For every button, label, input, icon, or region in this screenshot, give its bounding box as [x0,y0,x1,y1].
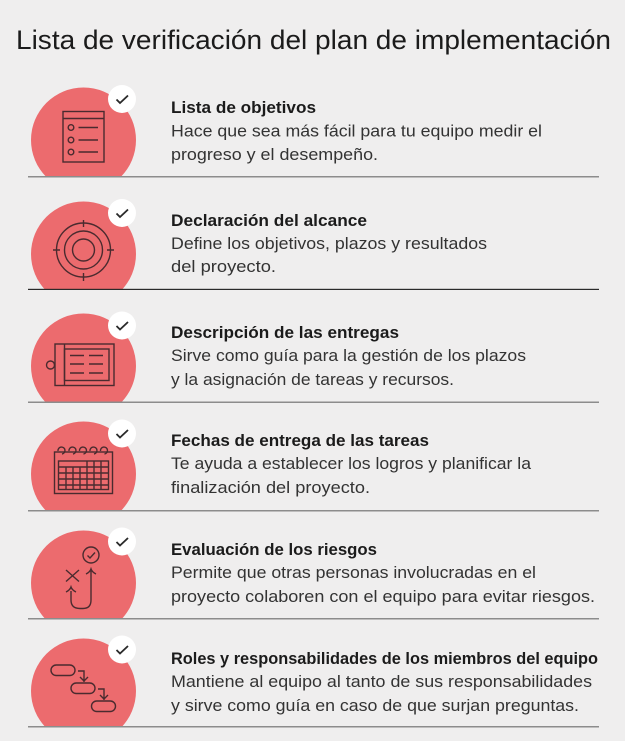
icon: check badge [108,85,136,113]
description [171,347,526,389]
icon: risk path [66,547,99,608]
description: Te ayuda a establecer los logros y planificar la [171,455,532,473]
panel: evaluación de los riesgos [28,528,599,620]
description: Hace que sea más fácil para tu equipo medir el [171,122,542,140]
title: Lista de verificación del plan de implementación [16,25,611,55]
panel: fechas de entrega [28,420,599,512]
icon: check badge [108,420,136,448]
panel: roles y responsabilidades [28,636,599,728]
panel: lista de objetivos [28,85,599,178]
description [171,564,595,606]
icon: check badge [108,636,136,664]
heading: Descripción de las entregas [171,324,399,342]
description: y la asignación de tareas y recursos. [171,371,454,389]
description: y sirve como guía en caso de que surjan preguntas. [171,697,579,715]
icon: check badge [108,528,136,556]
panel: declaración del alcance [28,199,599,290]
icon: target [53,220,114,281]
heading: Fechas de entrega de las tareas [171,432,429,450]
description: proyecto colaboren con el equipo para evitar riesgos. [171,588,595,606]
description: Permite que otras personas involucradas en el [171,564,536,582]
description: Define los objetivos, plazos y resultados [171,235,487,253]
icon: document folder [46,344,114,386]
description [171,122,542,164]
icon: check badge [108,199,136,227]
icon: flow chart [51,665,116,712]
icon: checklist [63,112,104,162]
description: del proyecto. [171,258,276,276]
description: finalización del proyecto. [171,479,370,497]
heading: Lista de objetivos [171,99,316,117]
icon: check badge [108,312,136,340]
description: Sirve como guía para la gestión de los plazos [171,347,526,365]
description: Mantiene al equipo al tanto de sus responsabilidades [171,673,592,691]
panel: descripción de las entregas [28,312,599,403]
heading: Declaración del alcance [171,212,367,230]
description [171,673,592,715]
description [171,455,532,497]
description: progreso y el desempeño. [171,146,378,164]
heading: Evaluación de los riesgos [171,541,377,559]
icon: calendar [54,447,112,494]
heading: Roles y responsabilidades de los miembros del equipo [171,650,598,668]
description [171,235,487,276]
